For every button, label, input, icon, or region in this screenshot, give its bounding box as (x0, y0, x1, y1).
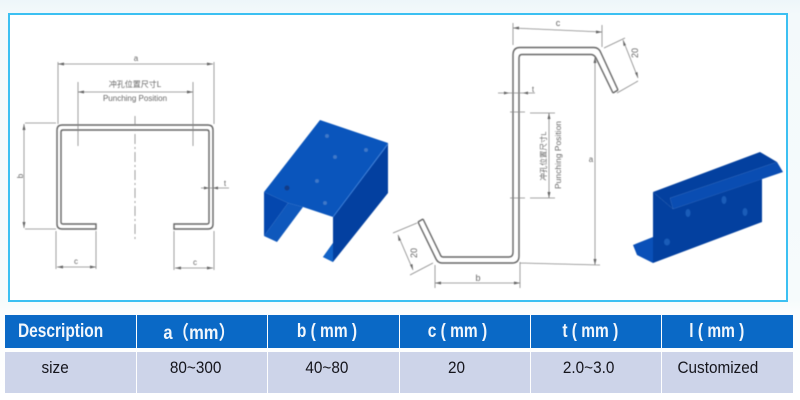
Z-profile labels: 冲孔位置尺寸L (538, 131, 548, 181)
header: c (mm) (400, 315, 530, 348)
C-profile labels: a (134, 54, 139, 63)
Z-profile labels: Punching Position (553, 121, 563, 189)
value: t: 2.0~3.0 (563, 358, 615, 377)
C-profile labels: b (16, 173, 25, 178)
C-profile labels (16, 54, 227, 267)
C-profile dimension lines (24, 62, 229, 270)
C-profile technical drawing (16, 54, 229, 270)
Z-profile labels: b (475, 273, 481, 283)
value: size (5, 352, 136, 393)
header: a (mm) (137, 315, 267, 348)
punched holes (284, 134, 368, 205)
3D blue C-channel (264, 120, 388, 262)
header: b (mm) (268, 315, 399, 348)
header: t (mm): t ( mm ) (562, 320, 618, 342)
Z-profile labels (409, 18, 640, 283)
header: t (mm) (531, 315, 661, 348)
value: c (400, 352, 530, 393)
C-profile labels: 冲孔位置尺寸L (109, 79, 162, 89)
Z-profile labels: t (532, 85, 535, 94)
Z-profile arrowheads (398, 26, 638, 284)
header: Description: Description (18, 320, 103, 342)
header: l (mm): l ( mm ) (689, 320, 744, 342)
3D blue Z-channel (633, 152, 783, 263)
value: l: Customized (678, 358, 758, 377)
C-profile labels: c (74, 257, 78, 266)
Z-profile labels: c (556, 18, 561, 28)
value: a (137, 352, 267, 393)
C-profile arrowheads (22, 62, 218, 270)
specification table (5, 315, 793, 393)
Z-profile technical drawing (393, 18, 640, 288)
value: l (662, 352, 793, 393)
C-profile labels: c (193, 258, 197, 267)
value: t (531, 352, 661, 393)
value: b (268, 352, 399, 393)
value: c: 20 (448, 358, 465, 377)
C-profile labels: Punching Position (103, 94, 167, 103)
header: l (mm) (662, 315, 793, 348)
C-profile labels: t (224, 179, 227, 188)
header: Description (5, 315, 136, 348)
value: b: 40~80 (305, 358, 348, 377)
panel: product drawings frame (8, 13, 788, 302)
value: a: 80~300 (170, 358, 222, 377)
C-profile outline (57, 125, 213, 229)
Z-profile labels: 20 (630, 48, 640, 58)
Z-profile dimension lines (393, 23, 638, 288)
header: c (mm): c ( mm ) (427, 320, 487, 342)
value: size: size (42, 358, 69, 377)
Z-profile labels: 20 (409, 248, 419, 258)
Z-profile outline (418, 48, 618, 263)
header: b (mm): b ( mm ) (296, 320, 357, 342)
header: a (mm): a（mm） (164, 323, 235, 344)
punched holes (664, 196, 748, 246)
Z-profile labels: a (589, 155, 594, 164)
